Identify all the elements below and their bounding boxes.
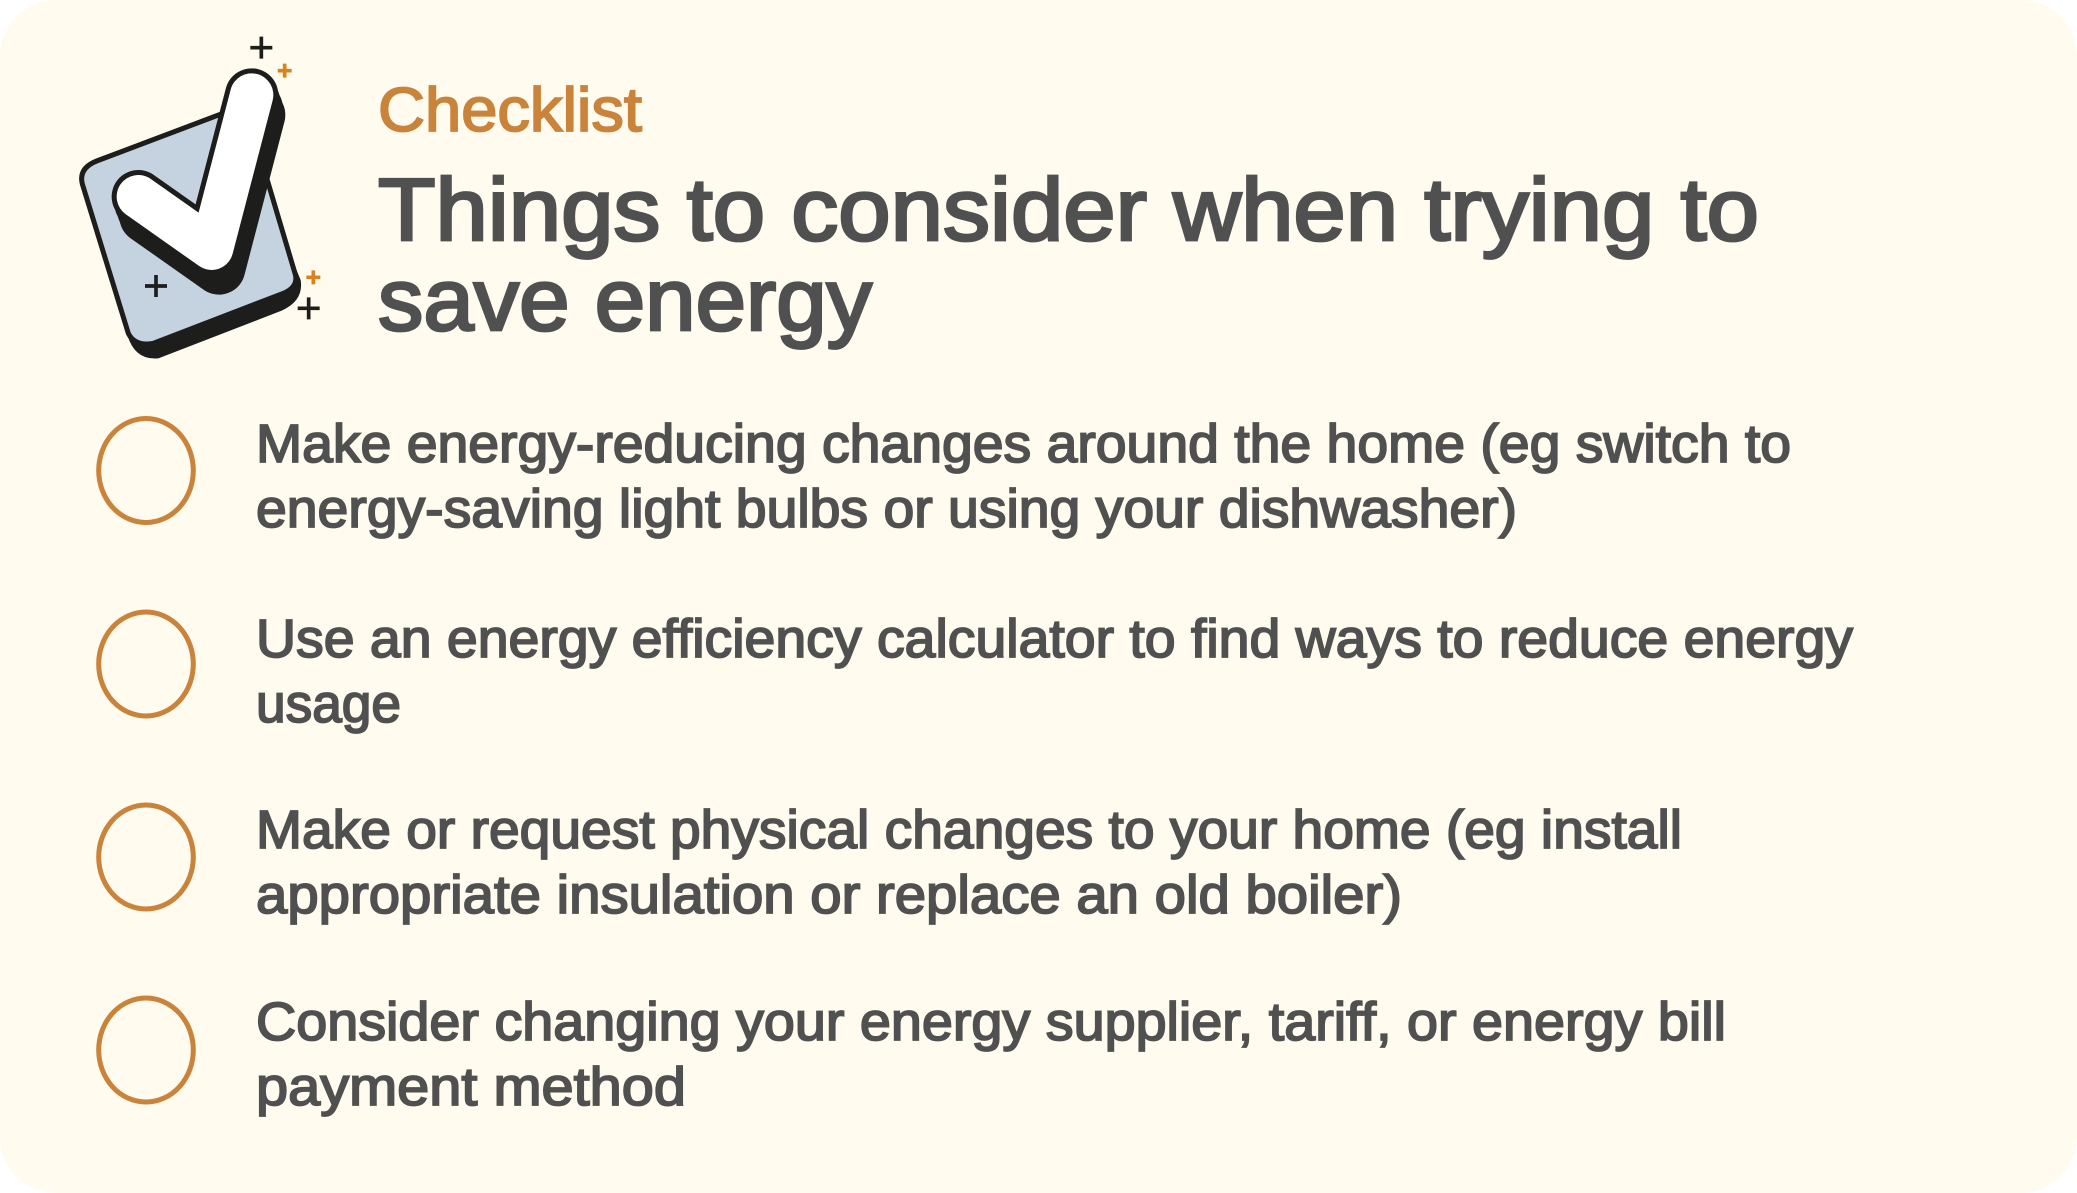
item 4 text xyxy=(256,992,1726,1117)
empty checkbox 4 xyxy=(99,998,193,1102)
checklist item 1 xyxy=(99,414,1791,539)
title: save energy xyxy=(378,250,872,349)
tile face xyxy=(82,105,296,344)
item 2 text xyxy=(256,609,1853,734)
sparkle: black bottom right xyxy=(298,297,320,319)
eyebrow: Checklist: Checklist xyxy=(378,76,642,145)
item 1 text: energy-saving light bulbs or using your dishwasher) xyxy=(256,479,1517,539)
item 2 text: usage xyxy=(256,674,401,734)
icon: tilted checkbox with check mark xyxy=(82,37,320,359)
empty checkbox 1 xyxy=(99,418,193,522)
item 3 text: Make or request physical changes to your home (eg install xyxy=(256,800,1682,860)
item 4 text: Consider changing your energy supplier, tariff, or energy bill xyxy=(256,992,1726,1052)
empty checkbox 2 xyxy=(99,612,193,716)
sparkle: black on tile xyxy=(145,275,167,297)
check mark shadow xyxy=(138,95,259,268)
checklist item 2 xyxy=(99,609,1853,734)
item 1 text xyxy=(256,414,1791,539)
item 3 text xyxy=(256,800,1682,925)
empty checkbox 3 xyxy=(99,805,193,909)
tile shadow xyxy=(127,267,301,359)
check mark face xyxy=(138,95,252,248)
sparkle: black top xyxy=(250,37,272,59)
item 4 text: payment method xyxy=(256,1057,686,1117)
sparkle: orange top xyxy=(278,64,292,78)
title xyxy=(378,160,1759,349)
item 3 text: appropriate insulation or replace an old boiler) xyxy=(256,865,1402,925)
checklist item 3 xyxy=(99,800,1682,925)
title: Things to consider when trying to xyxy=(378,160,1759,259)
checklist item 4 xyxy=(99,992,1726,1117)
item 2 text: Use an energy efficiency calculator to find ways to reduce energy xyxy=(256,609,1853,669)
check mark outline xyxy=(138,95,252,248)
sparkle: orange bottom right xyxy=(306,270,320,284)
item 1 text: Make energy-reducing changes around the home (eg switch to xyxy=(256,414,1791,474)
